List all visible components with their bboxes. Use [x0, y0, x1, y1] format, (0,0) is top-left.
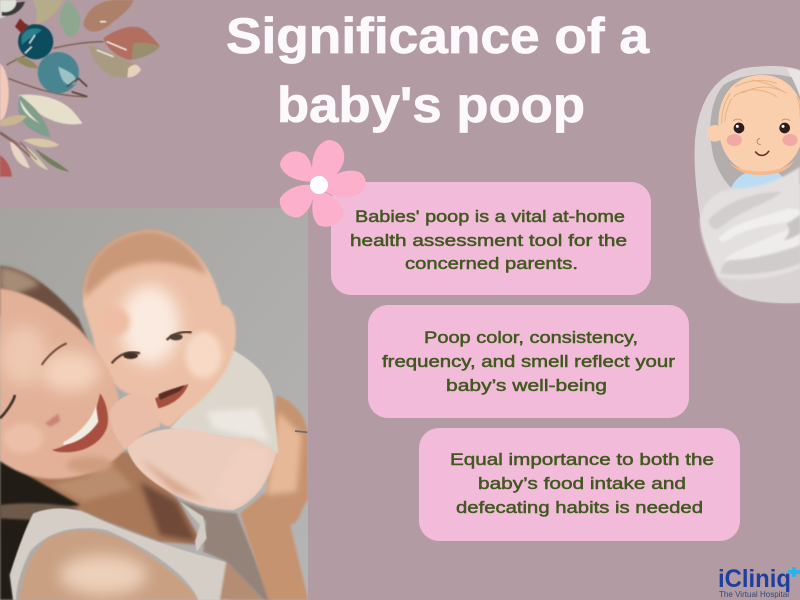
logo: iCliniq: The Virtual Hospital [719, 589, 789, 599]
neck [20, 452, 203, 545]
cheeks [727, 134, 742, 146]
chest [18, 530, 198, 600]
mother's eyes [42, 343, 67, 365]
lower dark hair [0, 461, 80, 600]
grey cloth [178, 500, 272, 600]
baby arm [127, 429, 277, 510]
mother's arm and hand [240, 395, 308, 600]
text: third statement: baby’s food intake and [478, 474, 686, 493]
logo: iCliniq: iCliniq [718, 565, 791, 593]
blanket wrap [700, 167, 800, 303]
text: first statement [350, 207, 627, 273]
baby head [83, 230, 236, 427]
title: baby's poop [277, 77, 585, 133]
hair [722, 80, 800, 123]
icon: pink flower [280, 140, 366, 227]
text: third statement [450, 450, 714, 517]
baby eyes [112, 352, 140, 363]
panel: food intake text box [419, 428, 740, 541]
title: Significance of a [226, 8, 650, 64]
baby mouth [155, 384, 188, 408]
text: second statement: Poop color, consistency, [424, 328, 638, 347]
baby hair [83, 230, 207, 298]
face [718, 75, 800, 173]
title [226, 8, 650, 133]
hood inner shadow [710, 74, 800, 188]
text: second statement [382, 328, 675, 395]
text: third statement: Equal importance to both the [450, 450, 714, 469]
mother's hair, top [0, 264, 90, 342]
baby shirt [170, 350, 278, 453]
illustration: watercolor leaves and berries [0, 0, 160, 177]
top straps [10, 508, 230, 600]
nose and mouth [757, 138, 761, 145]
text: first statement: health assessment tool for the [350, 231, 627, 250]
blue shirt [730, 170, 787, 190]
baby hand [110, 393, 160, 450]
mother's smile [52, 393, 108, 452]
photo: mother and baby [0, 205, 310, 600]
text: first statement: Babies' poop is a vital at-home [355, 207, 625, 226]
text: first statement: concerned parents. [405, 254, 578, 273]
skin under strap [220, 560, 263, 600]
illustration: swaddled baby [695, 66, 800, 303]
panel: well-being text box [368, 305, 689, 418]
text: second statement: frequency, and smell reflect your [382, 352, 675, 371]
eyes [734, 123, 744, 133]
panel: health assessment text box [331, 182, 651, 295]
hood and body wrap [695, 66, 800, 303]
text: second statement: baby’s well-being [446, 376, 607, 395]
ear [707, 125, 723, 142]
text: third statement: defecating habits is needed [456, 498, 703, 517]
icon: plus [788, 567, 800, 577]
mother's face [0, 288, 124, 479]
